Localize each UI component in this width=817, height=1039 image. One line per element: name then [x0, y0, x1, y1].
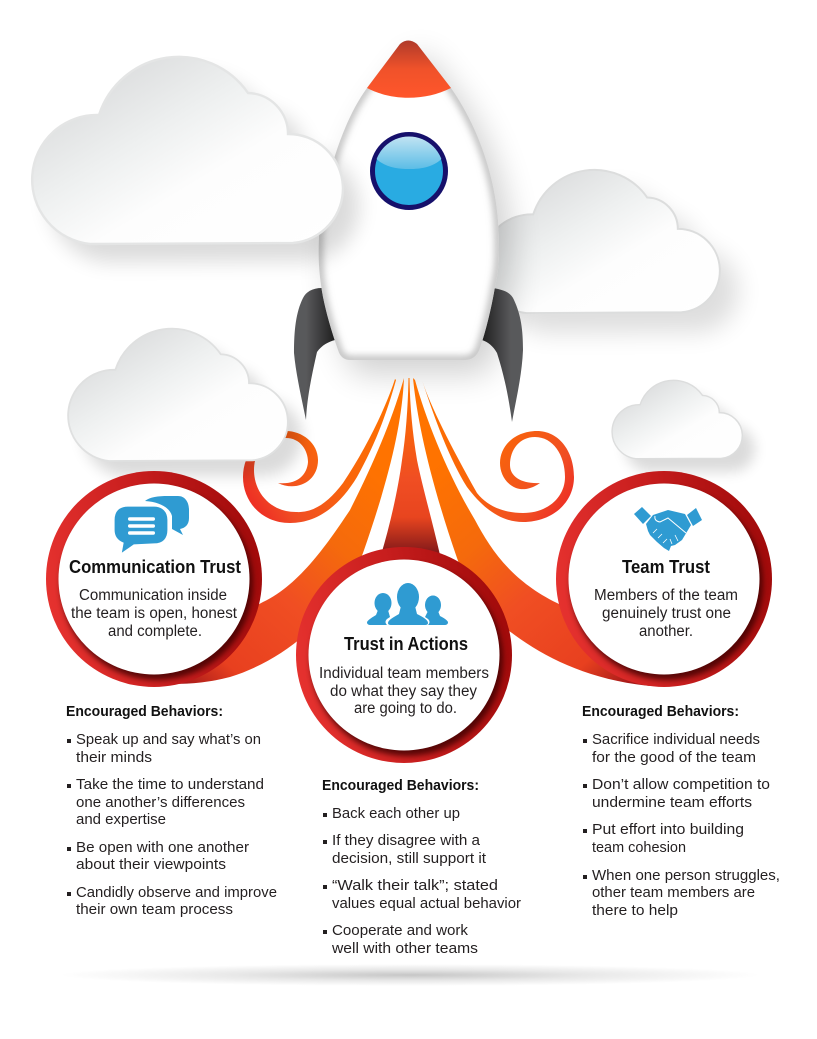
center flame: [381, 378, 440, 555]
text block: communication trust behaviors: their own team process: [76, 901, 233, 918]
rocket body: [319, 40, 499, 360]
right fin: [482, 288, 523, 422]
text: trust in actions description: do what they say they: [330, 683, 477, 700]
heading: encouraged behaviors center: Encouraged Behaviors:: [322, 778, 479, 794]
text block: team trust behaviors: Sacrifice individual needs: [592, 731, 760, 748]
text block: communication trust behaviors: about their viewpoints: [76, 856, 226, 873]
heading: communication trust: Communication Trust: [69, 557, 241, 577]
text block: trust in actions behaviors: “Walk their talk”; stated: [332, 877, 498, 894]
rocket: [294, 40, 523, 422]
text block: trust in actions behaviors: Cooperate and work: [332, 922, 468, 939]
text: team trust description: another.: [639, 623, 693, 640]
panel: team trust circle: [556, 471, 772, 687]
heading: encouraged behaviors left: Encouraged Behaviors:: [66, 704, 223, 720]
text block: trust in actions behaviors: values equal actual behavior: [332, 895, 521, 912]
nose cone: [367, 40, 451, 98]
cloud: small right: [612, 380, 755, 472]
text block: communication trust behaviors: [66, 704, 277, 918]
text block: trust in actions behaviors: Back each other up: [332, 805, 460, 822]
text block: team trust behaviors: there to help: [592, 902, 678, 919]
text block: communication trust behaviors: and expertise: [76, 811, 166, 828]
text block: communication trust behaviors: Candidly observe and improve: [76, 884, 277, 901]
text: communication trust description: Communication inside: [79, 587, 227, 604]
rocket shadow: [331, 54, 511, 374]
text: trust in actions description: [319, 665, 489, 717]
heading: trust in actions: Trust in Actions: [344, 634, 468, 654]
text block: trust in actions behaviors: well with other teams: [331, 940, 478, 957]
text block: team trust behaviors: for the good of the team: [592, 749, 756, 766]
heading: team trust: Team Trust: [622, 557, 710, 577]
left fin: [294, 288, 335, 420]
text block: team trust behaviors: undermine team efforts: [592, 794, 752, 811]
text: team trust description: Members of the team: [594, 587, 738, 604]
text: team trust description: genuinely trust one: [602, 605, 731, 622]
text block: trust in actions behaviors: If they disagree with a: [332, 832, 481, 849]
text: team trust description: [594, 587, 738, 640]
text: communication trust description: and complete.: [108, 623, 202, 640]
icon: handshake: [634, 507, 702, 551]
porthole window: [370, 130, 448, 208]
icon: speech bubbles: [114, 496, 189, 554]
ground shadow: [60, 964, 760, 986]
left big flame: [170, 378, 404, 684]
left curl flame: [243, 379, 396, 523]
text block: team trust behaviors: [582, 704, 780, 919]
panel: communication trust circle: [46, 471, 262, 687]
text: communication trust description: the team is open, honest: [71, 605, 238, 622]
exhaust flames: [170, 378, 650, 686]
text: communication trust description: [71, 587, 238, 640]
text: trust in actions description: are going to do.: [354, 700, 457, 717]
right big flame: [413, 378, 650, 686]
heading: encouraged behaviors right: Encouraged Behaviors:: [582, 704, 739, 720]
cloud: right behind rocket: [482, 170, 738, 333]
text block: team trust behaviors: When one person struggles,: [592, 867, 780, 884]
right curl flame: [422, 380, 574, 522]
text block: team trust behaviors: Don’t allow competition to: [592, 776, 770, 793]
icon: group of people: [367, 583, 448, 625]
text block: team trust behaviors: team cohesion: [592, 839, 686, 856]
text block: communication trust behaviors: Take the time to understand: [76, 776, 264, 793]
text: trust in actions description: Individual team members: [319, 665, 489, 682]
text block: trust in actions behaviors: [322, 778, 521, 957]
cloud: large top left: [32, 57, 359, 262]
text block: team trust behaviors: other team members are: [592, 884, 755, 901]
text block: trust in actions behaviors: decision, still support it: [332, 850, 487, 867]
cloud: left middle: [68, 329, 302, 477]
text block: communication trust behaviors: their minds: [76, 749, 152, 766]
text block: communication trust behaviors: Be open with one another: [76, 839, 249, 856]
text block: communication trust behaviors: one another’s differences: [76, 794, 245, 811]
panel: trust in actions circle: [296, 547, 512, 763]
text block: communication trust behaviors: Speak up and say what’s on: [76, 731, 261, 748]
text block: team trust behaviors: Put effort into building: [592, 821, 744, 838]
